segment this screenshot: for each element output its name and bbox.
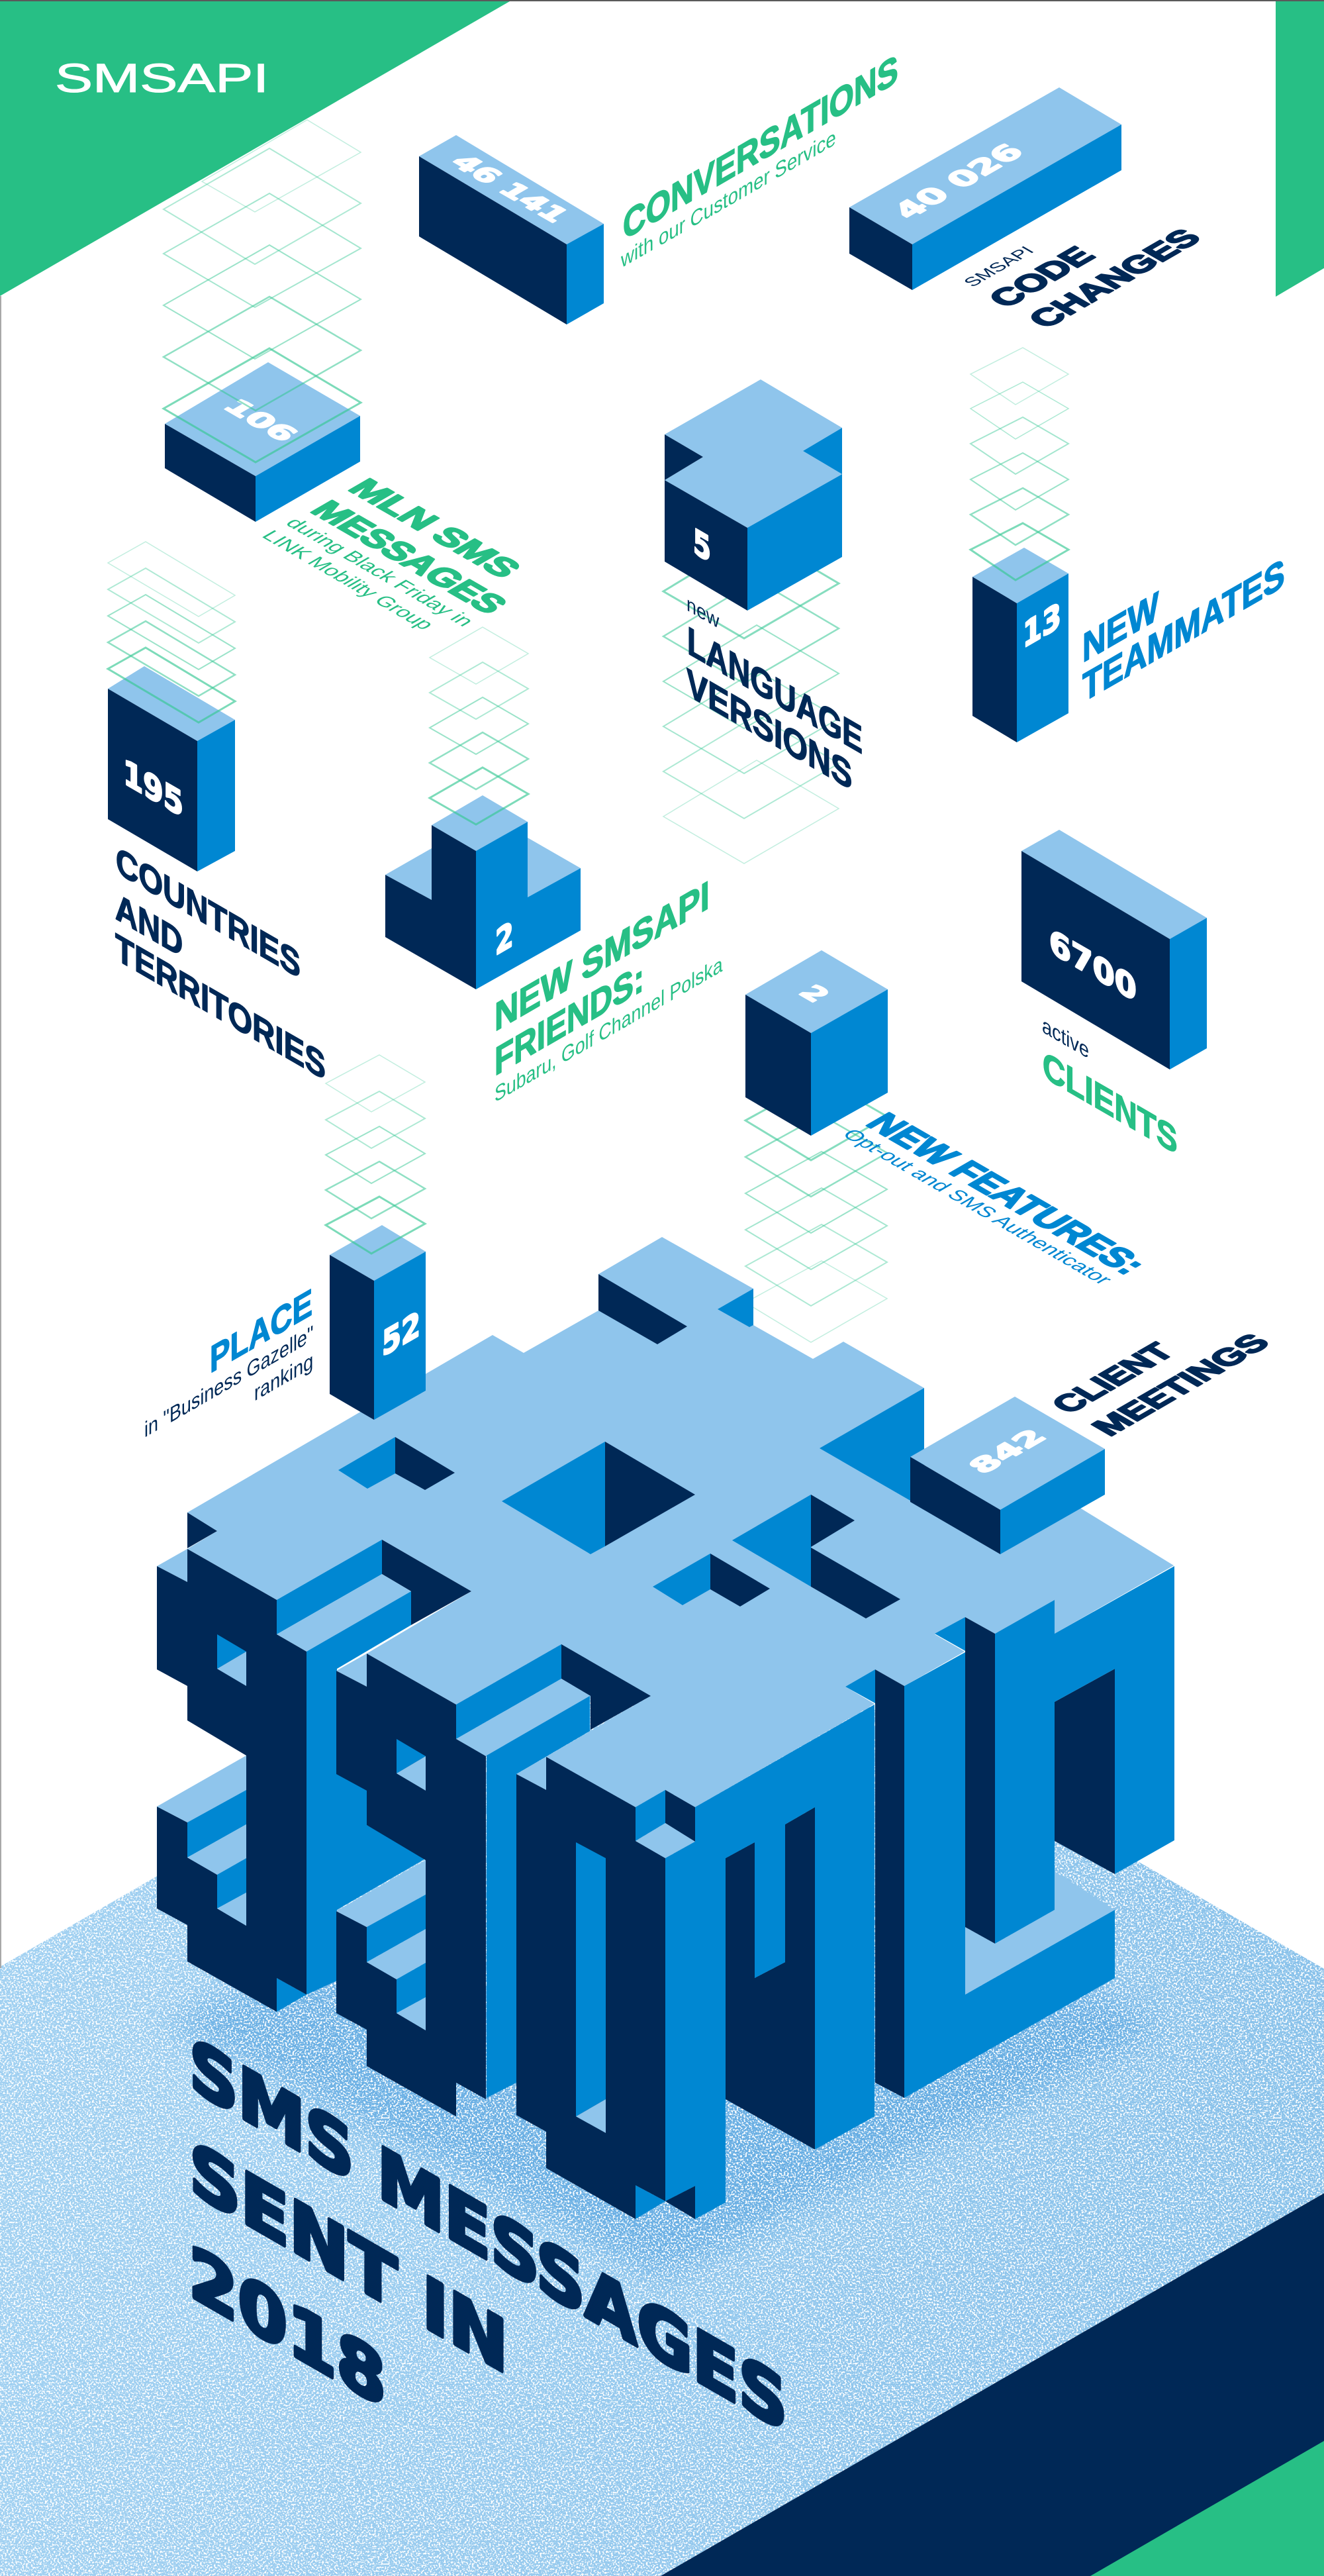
label: new features: NEW FEATURES: <box>857 1107 1156 1280</box>
number 52: 52 <box>382 1303 420 1365</box>
letter: m <box>665 1705 875 2219</box>
block: 46 141 conversations <box>419 135 604 324</box>
sublabel: subaru golf channel polska: Subaru, Golf Channel Polska <box>495 951 723 1107</box>
title: sms messages sent in 2018: SMS MESSAGES <box>189 2022 787 2450</box>
band: navy bottom right <box>661 2193 1324 2576</box>
surface hole big triangle <box>502 1442 695 1554</box>
label: clients: CLIENTS <box>1043 1043 1178 1164</box>
block: 52 place <box>330 1225 426 1420</box>
label: conversations: CONVERSATIONS <box>623 46 898 249</box>
digit: second 9 <box>336 1644 651 2116</box>
label: smsapi code changes <box>959 224 1209 333</box>
big isometric 990 mln cube <box>157 1237 1174 2219</box>
block: 5 language versions <box>665 379 842 611</box>
digit: first 9 <box>157 1512 471 2012</box>
sublabel: with our customer service: with our Customer Service <box>620 124 836 273</box>
wire stack above 13 <box>970 348 1068 580</box>
wire stack above friends block <box>430 627 528 824</box>
label: new smsapi friends: NEW SMSAPI <box>495 871 710 1040</box>
wire stack above 195 <box>108 542 235 722</box>
number 6700: 6700 <box>1049 921 1137 1010</box>
label: countries and territories <box>115 838 326 1089</box>
label: and: AND <box>115 885 183 966</box>
number 46 141: 46 141 <box>444 150 576 227</box>
number 2 top: 2 <box>792 981 837 1007</box>
digit: 0 <box>516 1757 695 2219</box>
label: friends: FRIENDS: <box>495 954 644 1085</box>
label: place in business gazelle ranking <box>144 1280 313 1442</box>
sublabel: link mobility group: LINK Mobility Group <box>257 527 440 633</box>
band: green top right <box>1276 1 1324 297</box>
label: code: CODE <box>980 242 1102 313</box>
band: green bottom right <box>1090 2441 1324 2576</box>
cube top surface <box>187 1237 1174 1807</box>
label: client meetings <box>1043 1328 1278 1441</box>
number 842: 842 <box>961 1424 1054 1478</box>
surface hole A <box>338 1437 455 1490</box>
number 40 026: 40 026 <box>886 139 1031 224</box>
label: active clients <box>1042 1012 1178 1164</box>
label: new smsapi friends <box>495 871 723 1107</box>
label: new teammates <box>1082 549 1285 711</box>
label: mln sms messages: MLN SMS <box>340 473 529 583</box>
label: place in business gazelle ranking: PLACE <box>210 1280 312 1382</box>
surface hole C <box>653 1554 770 1607</box>
label: new language versions <box>686 591 863 799</box>
number 195: 195 <box>123 752 183 826</box>
block: 6700 clients <box>1021 830 1207 1069</box>
block: 40 026 code changes <box>849 87 1121 290</box>
title line: 2018: 2018 <box>189 2229 386 2426</box>
label: messages: MESSAGES <box>303 495 516 619</box>
block: 842 client meetings <box>910 1397 1105 1554</box>
band: green top left <box>0 1 510 296</box>
letter: l <box>845 1617 1115 2098</box>
floor panel with noise <box>0 1583 1324 2576</box>
label: language: LANGUAGE <box>687 618 863 763</box>
label: countries and territories: COUNTRIES <box>116 838 301 987</box>
label: client meetings: CLIENT <box>1043 1338 1182 1418</box>
label: territories: TERRITORIES <box>115 925 326 1089</box>
label: new teammates: NEW <box>1082 582 1159 671</box>
sublabel: opt-out and sms authenticator: Opt-out and SMS Authenticator <box>837 1126 1117 1288</box>
block: 13 new teammates <box>972 548 1068 742</box>
label: mln sms messages <box>257 473 529 633</box>
wire stack above 106 <box>164 120 361 462</box>
block: 195 countries <box>108 666 235 871</box>
wire stack below features block <box>745 1079 887 1342</box>
number 106: 106 <box>216 395 305 446</box>
raised block side <box>598 1274 687 1344</box>
label: teammates: TEAMMATES <box>1082 549 1285 711</box>
label: active clients: active <box>1042 1012 1089 1064</box>
title line: sent in: SENT IN <box>189 2125 508 2392</box>
sublabel: ranking: ranking <box>254 1347 313 1406</box>
sublabel: in business gazelle: in "Business Gazelle" <box>144 1320 313 1442</box>
label: new language versions: new <box>686 591 720 634</box>
label: versions: VERSIONS <box>686 660 852 799</box>
letter: n <box>995 1566 1174 1944</box>
block: 2 new features <box>745 950 888 1136</box>
label: meetings: MEETINGS <box>1084 1328 1278 1441</box>
number 13: 13 <box>1023 595 1061 657</box>
surface hole D <box>732 1495 900 1618</box>
logo SMSAPI: SMSAPI <box>55 56 269 101</box>
label: changes: CHANGES <box>1020 224 1209 333</box>
block: 2 friends <box>385 795 581 989</box>
block: 106 mln sms messages <box>165 362 360 522</box>
sublabel: during black friday in: during Black Friday in <box>281 515 479 630</box>
number 5: 5 <box>693 521 711 571</box>
label: smsapi code changes: SMSAPI <box>959 243 1039 289</box>
number 2: 2 <box>495 914 514 964</box>
wire stack below language block <box>663 535 839 864</box>
wire stack above 52 <box>326 1055 425 1254</box>
